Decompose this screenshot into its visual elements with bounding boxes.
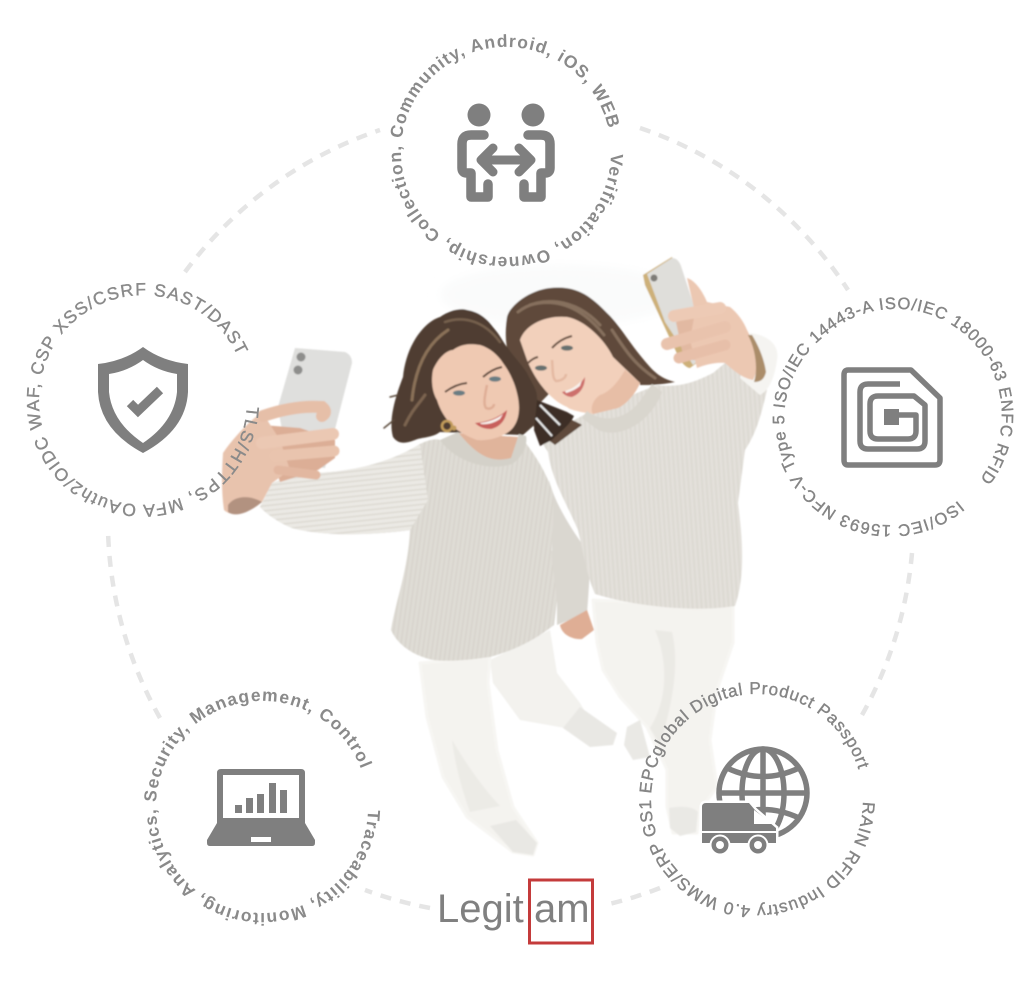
- badge: security: [26, 282, 260, 517]
- right hair highlights: [518, 301, 655, 378]
- badge: analytics: [144, 692, 380, 926]
- left hand with fingers: [222, 407, 335, 514]
- badge: logistics: [639, 682, 875, 918]
- curved label: analytics: Traceability, Monitoring, Analytics, Security, Management, Control: [144, 692, 380, 926]
- curved label: standards: ISO/IEC 15693 NFC-V Type 5 ISO/IEC 14443-A ISO/IEC 18000-63 ENFC RFID: [772, 297, 1014, 537]
- right woman's features: [528, 336, 585, 397]
- right neck shadow: [592, 370, 640, 414]
- icon: globe and delivery van: [702, 749, 807, 854]
- central photo: two women taking selfies: [222, 257, 777, 855]
- left woman's back shoe: [490, 820, 537, 855]
- left woman's features: [442, 367, 507, 431]
- joined hands: [560, 610, 594, 639]
- left woman's neck: [457, 433, 518, 463]
- left woman's front shoe: [563, 707, 617, 747]
- logo: Legitam: am: [534, 887, 590, 931]
- right hand with fingers: [667, 278, 766, 382]
- right woman's face and neck: [520, 317, 640, 414]
- badge: standards: [772, 297, 1014, 537]
- right woman's shoes: [624, 720, 698, 836]
- left woman's back leg: [420, 657, 537, 855]
- left hair highlights: [384, 319, 500, 428]
- icon: laptop with bar chart: [207, 769, 315, 846]
- right woman's hair: [506, 287, 675, 445]
- left woman's face: [432, 344, 519, 440]
- curved label: security: TLS/HTTPS, MFA OAuth2/OIDC WAF, CSP XSS/CSRF SAST/DAST: [26, 282, 260, 517]
- icon: two people exchange: [462, 104, 550, 197]
- left woman's collar: [440, 432, 526, 467]
- dashed connector ring: [108, 128, 912, 908]
- trouser shading: [452, 740, 500, 812]
- right woman's trouser folds: [650, 630, 675, 745]
- white streaks: [536, 405, 560, 436]
- left sleeve ribbing: [260, 444, 428, 534]
- right phone back: [647, 258, 709, 365]
- curved label: logistics: RAIN RFID Industry 4.0 WMS/ERP GS1 EPCglobal Digital Product Passport: [639, 682, 875, 918]
- right woman's trousers: [593, 600, 733, 833]
- left woman's front leg: [490, 630, 590, 728]
- logo: Legitam: Legit: [437, 887, 524, 931]
- left woman's hair: [391, 309, 540, 443]
- right woman's sweater: [538, 363, 767, 609]
- soft background glow: [440, 265, 680, 325]
- icon: shield with check: [98, 347, 188, 453]
- right phone camera: [650, 274, 658, 282]
- badge: community: [390, 34, 624, 266]
- right woman's collar: [582, 384, 662, 433]
- left phone: [278, 348, 352, 468]
- right woman's inner sleeve: [549, 480, 591, 625]
- right phone: [643, 257, 710, 368]
- icon: RFID chip: [844, 370, 940, 465]
- left woman's sweater: [260, 438, 557, 661]
- logo: Legitam: [437, 880, 592, 943]
- dark hair with white streaks between heads: [534, 400, 574, 446]
- right woman's cuff: [740, 333, 777, 395]
- curved label: community: Verification, Ownership, Collection, Community, Android, iOS, WEB: [390, 34, 624, 266]
- left phone cameras: [294, 352, 306, 374]
